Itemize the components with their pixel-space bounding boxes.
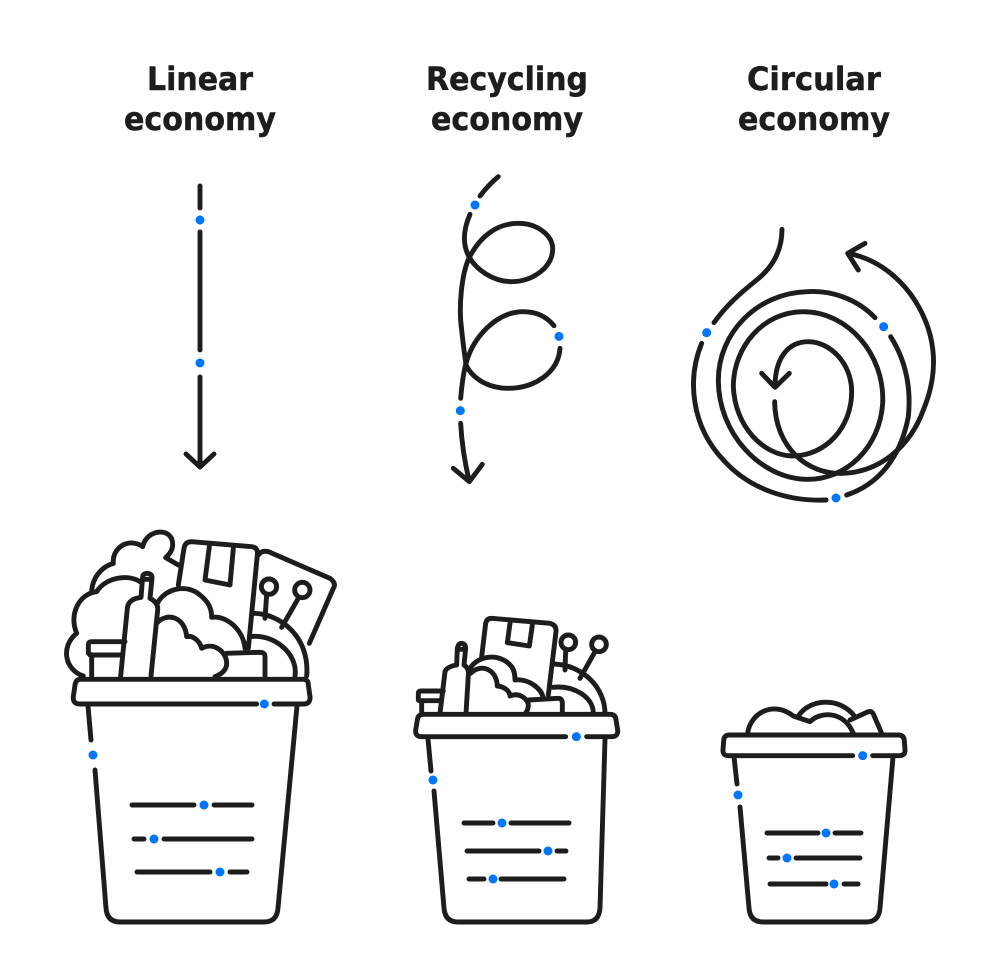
- arrow: recycling looped path: [453, 177, 563, 482]
- title: circular economy: Circular: [747, 60, 881, 98]
- bucket label lines: recycling: [464, 818, 569, 884]
- bucket body: recycling: [428, 739, 605, 922]
- bucket body: linear: [88, 706, 297, 922]
- bucket label lines: linear: [132, 800, 252, 876]
- bucket contents: recycling: [416, 618, 618, 741]
- title: circular economy: economy: [738, 100, 890, 138]
- title: recycling economy: economy: [431, 100, 583, 138]
- title: linear economy: [124, 60, 276, 138]
- bucket contents: linear: [67, 532, 334, 708]
- arrow: circular spiral path: [694, 229, 934, 502]
- title: recycling economy: [426, 60, 588, 138]
- title: circular economy: [738, 60, 890, 138]
- title: recycling economy: Recycling: [426, 60, 588, 98]
- arrow: linear straight path: [186, 186, 214, 467]
- title: linear economy: Linear: [147, 60, 253, 98]
- icon: full linear waste bucket: [67, 532, 334, 922]
- icon: medium recycling waste bucket: [416, 618, 618, 922]
- bucket body: circular: [734, 757, 893, 922]
- title: linear economy: economy: [124, 100, 276, 138]
- bucket contents: circular: [723, 702, 905, 760]
- bucket label lines: circular: [767, 828, 861, 888]
- icon: small circular waste bucket: [723, 702, 905, 922]
